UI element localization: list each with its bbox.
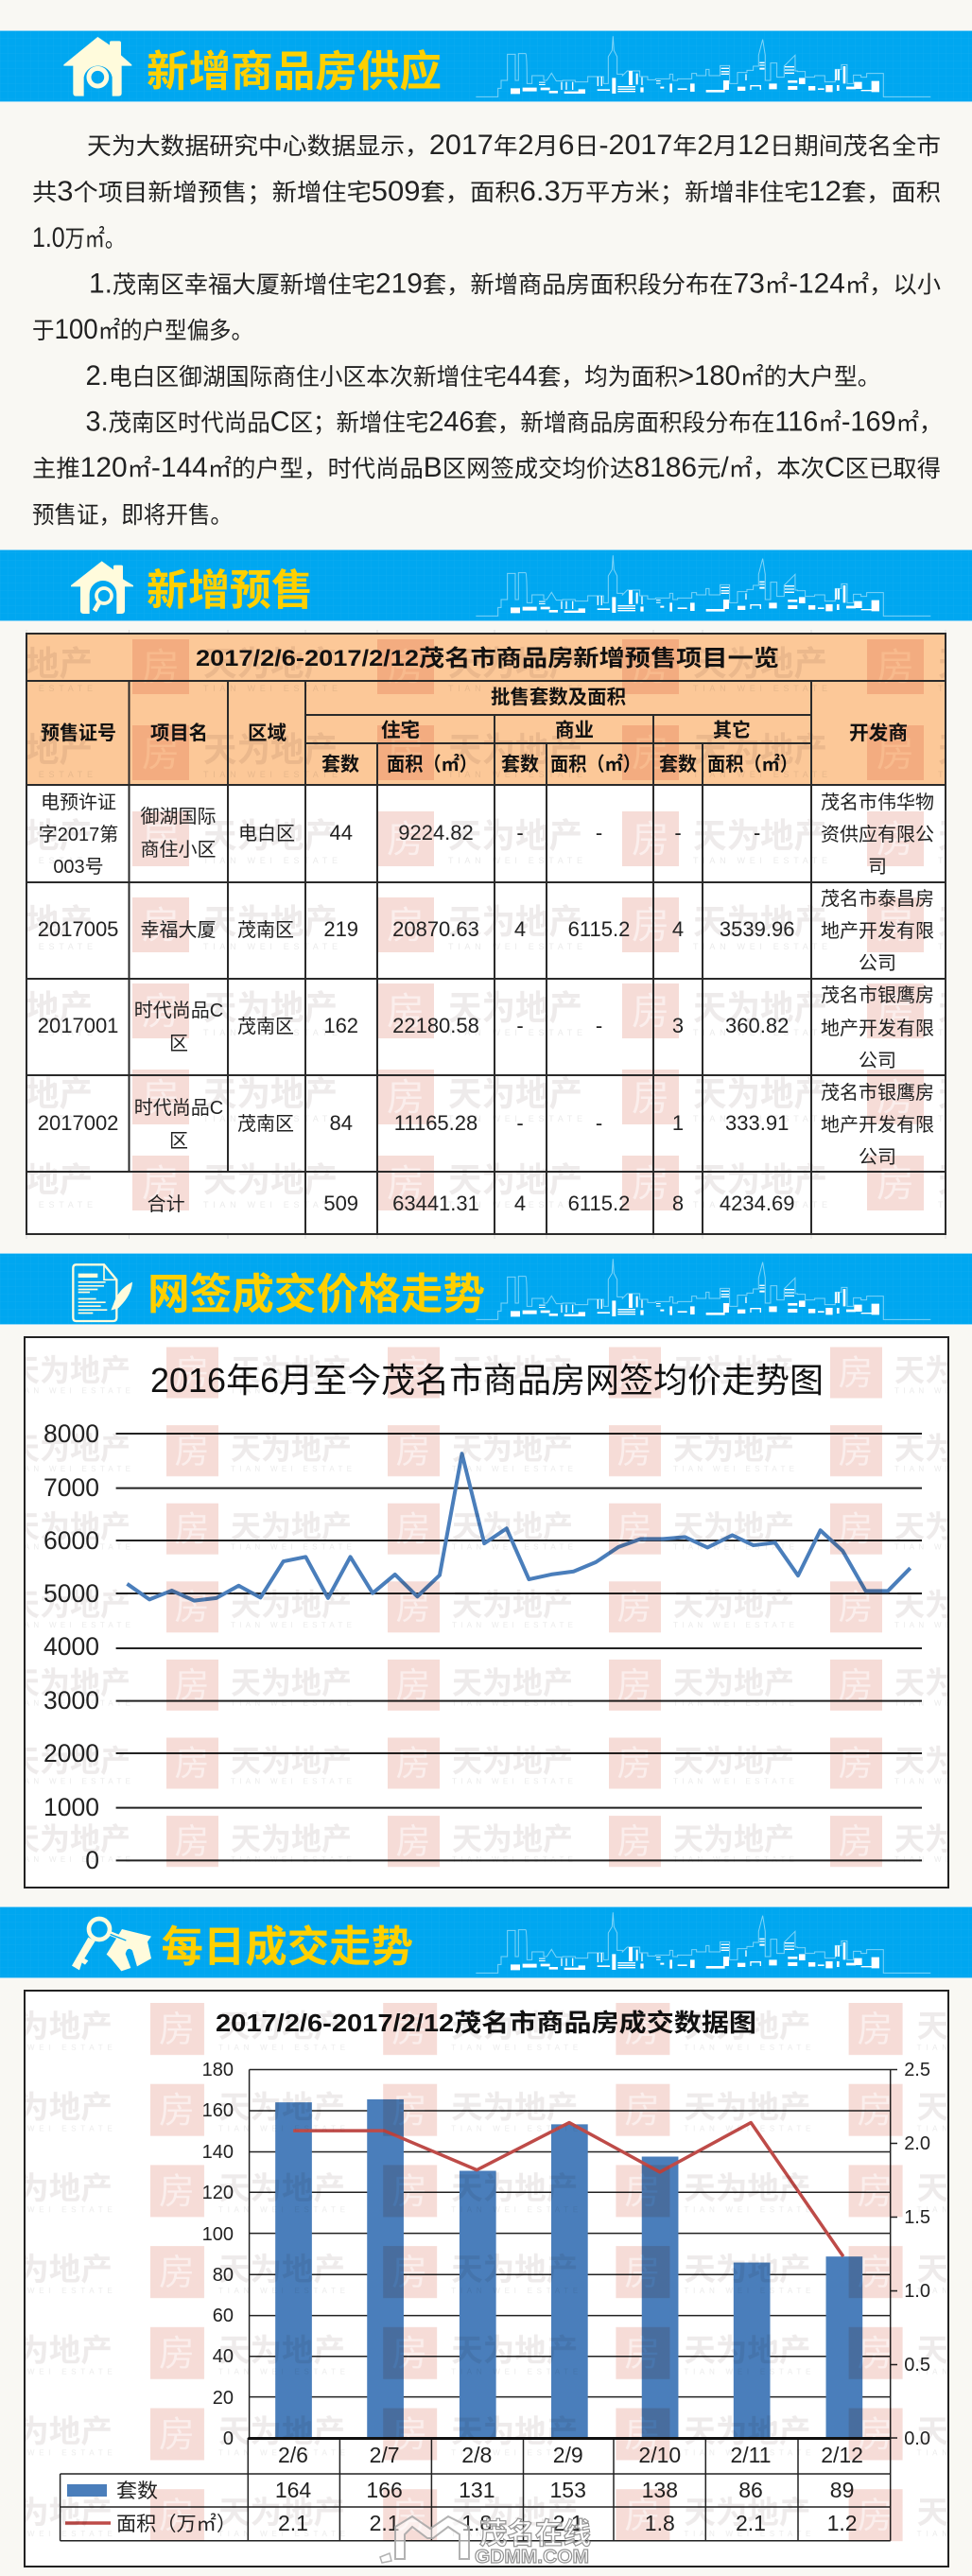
table row: 御湖国际商住小区: - [596, 821, 602, 844]
table row: total [148, 1192, 794, 1215]
data table: dates: 2/12 [821, 2443, 863, 2467]
y axis labels: 1000 [43, 1793, 99, 1821]
table row: 御湖国际商住小区: 44 [329, 821, 353, 844]
table row: 时代尚品C区 2017002: 2017002 [38, 1111, 118, 1135]
data table: dates [278, 2443, 863, 2467]
table row: total: 8 [672, 1192, 684, 1215]
table header: 套数 [659, 754, 697, 775]
table row: 时代尚品C区 2017001: 360.82 [725, 1014, 789, 1037]
table row: 时代尚品C区 2017001: 茂南区 [237, 1016, 294, 1037]
icon: document and pen [73, 1264, 132, 1321]
table header: 住宅 [381, 719, 420, 741]
table row: 幸福大厦: 4 [514, 917, 526, 941]
table header: 其它 [713, 719, 751, 741]
y axis labels [43, 1419, 99, 1874]
banner: new presales [0, 549, 972, 621]
table header: 商业 [555, 720, 594, 741]
legend and row: area: 1.8 [645, 2511, 675, 2535]
table row: 时代尚品C区 2017002: 84 [329, 1111, 353, 1135]
data table: dates: 2/8 [461, 2443, 492, 2467]
right axis labels: 2.5 [904, 2060, 930, 2080]
icon: house with magnifier [71, 561, 133, 614]
table row: 幸福大厦: 茂名市泰昌房 [821, 888, 934, 910]
legend and row: area: 面积（万㎡） [116, 2513, 236, 2535]
table row: 时代尚品C区 2017002: 地产开发有限 [821, 1114, 934, 1136]
table header: 面积（㎡） [550, 754, 641, 775]
table row: 时代尚品C区 2017002: 时代尚品C [134, 1097, 223, 1119]
table row: 御湖国际商住小区: 司 [868, 857, 887, 878]
skyline illustration [476, 1912, 930, 1973]
table row: 时代尚品C区 2017002 [38, 1082, 934, 1168]
table header: 套数 [501, 754, 539, 775]
y axis labels: 2000 [43, 1739, 99, 1767]
table row: 御湖国际商住小区: 字2017第 [39, 824, 118, 845]
chart title: 2016年6月至今茂名市商品房网签均价走势图 [150, 1361, 824, 1400]
legend and row: units: 89 [830, 2478, 854, 2502]
table row: 时代尚品C区 2017002: 区 [169, 1131, 188, 1152]
skyline illustration [476, 1259, 930, 1319]
table row: 幸福大厦: 20870.63 [392, 917, 479, 941]
table header: 项目名 [150, 722, 208, 744]
table row: total: 4234.69 [720, 1192, 794, 1215]
left axis labels: 100 [202, 2224, 234, 2245]
banner title: 网签成交价格走势 [148, 1270, 485, 1318]
table row: 幸福大厦: 219 [323, 917, 358, 941]
table row: 御湖国际商住小区: - [516, 821, 524, 844]
legend and row: area [65, 2511, 858, 2535]
price line [127, 1453, 911, 1601]
table row: 时代尚品C区 2017002: 11165.28 [394, 1111, 477, 1135]
table row: 时代尚品C区 2017001: 公司 [859, 1051, 896, 1071]
bars: units sold [275, 2099, 862, 2438]
logo watermark: 茂名在线 GDMM.COM [380, 2516, 591, 2567]
left axis labels: 80 [213, 2265, 234, 2286]
data table: dates: 2/10 [638, 2443, 681, 2467]
table row: 时代尚品C区 2017001: 162 [323, 1014, 358, 1037]
table row: total: 6115.2 [568, 1192, 630, 1215]
banner: daily transaction trend [0, 1906, 972, 1978]
legend and row: area: 2.1 [370, 2511, 400, 2535]
logo watermark: 茂名在线 GDMM.COM: 茂名在线 [479, 2517, 591, 2550]
right axis labels: 0.5 [904, 2355, 930, 2376]
table row: 幸福大厦: 2017005 [38, 917, 118, 941]
legend and row: units: 138 [642, 2478, 678, 2502]
left axis labels: 20 [213, 2388, 234, 2409]
left axis labels: 160 [202, 2100, 234, 2121]
icon: house with ring [63, 37, 131, 96]
table header: 套数 [321, 754, 359, 775]
y axis labels: 0 [85, 1846, 99, 1874]
table row: 御湖国际商住小区: - [674, 821, 682, 844]
text block: summary paragraphs: 主推120㎡-144㎡的户型，时代尚品B区网签成交均价达8186元/㎡，本次C区已取得 [32, 452, 941, 483]
skyline illustration [476, 36, 930, 96]
legend and row: area: 2.1 [736, 2511, 766, 2535]
text block: summary paragraphs: 2.电白区御湖国际商住小区本次新增住宅44套，均为面积>180㎡的大户型。 [85, 360, 881, 392]
legend and row: units: 套数 [116, 2480, 158, 2502]
table header: 批售套数及面积 [491, 687, 626, 708]
y axis labels: 5000 [43, 1579, 99, 1608]
legend and row: units [67, 2478, 854, 2502]
legend and row: units: 131 [459, 2478, 495, 2502]
left axis labels [202, 2060, 234, 2449]
table row: 御湖国际商住小区: 电预许证 [41, 792, 116, 813]
text block: summary paragraphs: 共3个项目新增预售；新增住宅 509套，面积6.3万平方米；新增非住宅 12套，面积 [32, 176, 941, 207]
right axis labels: 0.0 [904, 2428, 930, 2449]
left axis labels: 60 [213, 2306, 234, 2326]
icon: key and house [72, 1919, 151, 1971]
left axis labels: 40 [213, 2346, 234, 2367]
table row: 御湖国际商住小区: 商住小区 [140, 839, 216, 861]
table row: 御湖国际商住小区: 003号 [53, 857, 104, 878]
table row: total: 合计 [148, 1193, 185, 1215]
table header: 开发商 [849, 722, 908, 744]
y axis labels: 8000 [43, 1419, 99, 1448]
text block: summary paragraphs: 1.茂南区幸福大厦新增住宅219套，新增商品房面积段分布在73㎡-124㎡，以小 [89, 269, 941, 299]
table header: 面积（㎡） [707, 754, 798, 775]
data table: dates: 2/9 [553, 2443, 583, 2467]
legend and row: units: 164 [275, 2478, 311, 2502]
table row: 时代尚品C区 2017002: - [516, 1111, 524, 1135]
y axis labels: 3000 [43, 1686, 99, 1714]
table title: 2017/2/6-2017/2/12茂名市商品房新增预售项目一览 [196, 646, 779, 671]
left axis labels: 0 [223, 2428, 234, 2449]
panel: price trend line chart [25, 1337, 948, 1888]
table row: 幸福大厦: 茂南区 [237, 919, 294, 941]
table row: 御湖国际商住小区 [39, 792, 934, 878]
y axis labels: 4000 [43, 1632, 99, 1661]
table row: 时代尚品C区 2017001 [38, 984, 934, 1071]
legend and row: area: 1.8 [461, 2511, 492, 2535]
table row: total: 509 [323, 1192, 358, 1215]
right axis labels: 1.5 [904, 2207, 930, 2228]
panel: daily transaction combo chart [25, 1991, 948, 2567]
text block: summary paragraphs: 预售证，即将开售。 [32, 502, 233, 529]
chart title: 2017/2/6-2017/2/12茂名市商品房成交数据图 [216, 2009, 756, 2037]
text block: summary paragraphs: 1.0万㎡。 [32, 222, 125, 253]
table row: 御湖国际商住小区: 电白区 [238, 823, 295, 844]
table row: 御湖国际商住小区: 9224.82 [398, 821, 474, 844]
legend and row: area: 2.1 [278, 2511, 308, 2535]
table row: 时代尚品C区 2017002: 1 [672, 1111, 684, 1135]
y axis labels: 6000 [43, 1526, 99, 1555]
right axis labels [904, 2060, 930, 2449]
right axis labels: 2.0 [904, 2133, 930, 2154]
table row: 时代尚品C区 2017001: 地产开发有限 [821, 1018, 934, 1039]
table row: total: 63441.31 [392, 1192, 479, 1215]
legend and row: units: 86 [738, 2478, 763, 2502]
table row: 时代尚品C区 2017002: 茂名市银鹰房 [821, 1082, 934, 1104]
legend and row: area: 1.2 [827, 2511, 858, 2535]
table row: 时代尚品C区 2017001: 茂名市银鹰房 [821, 984, 934, 1006]
data table grid [61, 2438, 891, 2541]
table row: 幸福大厦: 幸福大厦 [140, 919, 216, 941]
table row: 时代尚品C区 2017002: 公司 [859, 1147, 896, 1168]
banner title: 每日成交走势 [161, 1923, 413, 1971]
table row: 时代尚品C区 2017001: 区 [169, 1034, 188, 1054]
banner title: 新增商品房供应 [147, 47, 442, 96]
table header: 预售证号 [41, 722, 116, 744]
table row: 幸福大厦: 6115.2 [568, 917, 630, 941]
table row: 时代尚品C区 2017001: 时代尚品C [134, 1000, 223, 1021]
line: floor area [293, 2123, 843, 2256]
banner title: 新增预售 [147, 566, 313, 615]
text block: summary paragraphs [32, 130, 942, 529]
table row: 时代尚品C区 2017001: 3 [672, 1014, 684, 1037]
left axis labels: 140 [202, 2142, 234, 2163]
legend and row: area: 2.1 [553, 2511, 583, 2535]
table row: 御湖国际商住小区: - [754, 821, 760, 844]
data table: dates: 2/7 [370, 2443, 400, 2467]
table row: 时代尚品C区 2017002: 茂南区 [237, 1113, 294, 1135]
right axis labels: 1.0 [904, 2281, 930, 2302]
left axis labels: 120 [202, 2183, 234, 2203]
table row: 时代尚品C区 2017001: 2017001 [38, 1014, 118, 1037]
table row: total: 4 [514, 1192, 526, 1215]
table row: 幸福大厦: 地产开发有限 [821, 920, 934, 942]
table row: 御湖国际商住小区: 御湖国际 [140, 806, 216, 827]
legend and row: units: 166 [366, 2478, 403, 2502]
table row: 时代尚品C区 2017001: - [516, 1014, 524, 1037]
table row: 御湖国际商住小区: 资供应有限公 [821, 824, 934, 845]
skyline illustration [476, 555, 930, 616]
table row: 时代尚品C区 2017001: - [596, 1014, 602, 1037]
table row: 时代尚品C区 2017002: 333.91 [725, 1111, 789, 1135]
table header: 面积（㎡） [387, 754, 477, 775]
plot gridlines and axes [250, 2069, 897, 2438]
text block: summary paragraphs: 3.茂南区时代尚品C区；新增住宅246套，新增商品房面积段分布在116㎡-169㎡， [85, 407, 942, 437]
table row: 时代尚品C区 2017002: - [596, 1111, 602, 1135]
table row: 幸福大厦: 4 [672, 917, 684, 941]
table row: 幸福大厦: 3539.96 [720, 917, 794, 941]
data table: dates: 2/6 [278, 2443, 308, 2467]
table header: 区域 [248, 722, 286, 744]
y axis gridlines [116, 1434, 922, 1860]
text block: summary paragraphs: 于100㎡的户型偏多。 [32, 314, 253, 345]
data table: dates: 2/11 [730, 2443, 772, 2467]
table row: 幸福大厦 [38, 888, 934, 974]
banner: new commercial housing supply [0, 30, 972, 102]
table header [41, 687, 908, 775]
banner: online signing price trend [0, 1253, 972, 1325]
logo watermark: 茂名在线 GDMM.COM: GDMM.COM [475, 2547, 589, 2567]
legend and row: units: 153 [550, 2478, 586, 2502]
panel: presale projects table [26, 630, 946, 1239]
text block: summary paragraphs: 天为大数据研究中心数据显示， 2017年2月6日-2017年2月12日期间茂名全市 [87, 130, 941, 161]
table row: 御湖国际商住小区: 茂名市伟华物 [821, 792, 934, 813]
left axis labels: 180 [202, 2060, 234, 2080]
y axis labels: 7000 [43, 1473, 99, 1502]
table row: 时代尚品C区 2017001: 22180.58 [392, 1014, 479, 1037]
table row: 幸福大厦: 公司 [859, 953, 896, 974]
